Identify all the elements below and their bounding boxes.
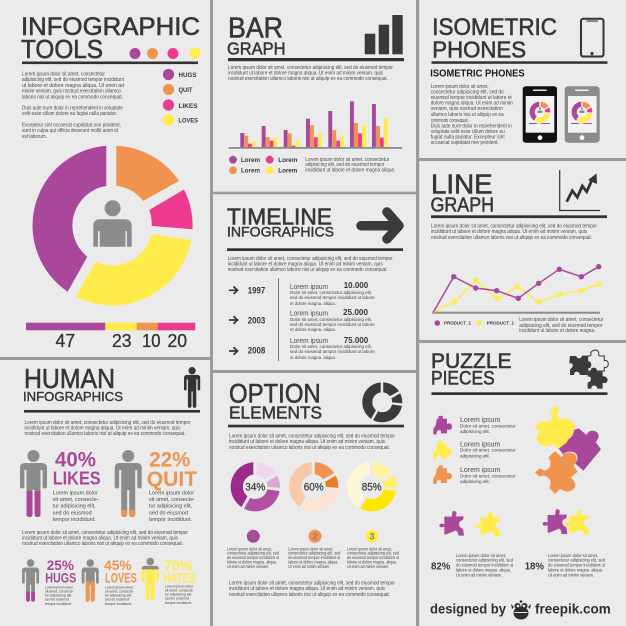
timeline years: 2008 [248,346,265,356]
puzzle legend: orange: Lorem ipsum [460,467,500,474]
chart legend: PRODUCT_1 [487,321,514,326]
donut chart [33,146,193,305]
intro text: ut labore et dolore magna aliqua. Ut enim ad [22,83,124,89]
option 1: consectetur adipisicing elit, sed [227,550,280,556]
subheading: ISOMETRIC PHONES [430,69,525,80]
line chart [432,264,601,314]
stat: 40% likes: sit amet, consecte- [53,497,99,503]
person: 45% loves [82,559,99,602]
puzzle legend: purple: Dolor sit amet, consectetur [460,424,516,428]
bar values: 47 [56,331,75,351]
option 1 [227,530,280,569]
stat: 18%: do eiusmod tempor incididunt ut [548,562,606,567]
legend: HUGS [178,72,197,79]
phone: black [523,86,557,143]
puzzle legend: purple: Lorem ipsum [460,417,500,424]
legend: LOVES [178,118,199,124]
intro text: Excepteur sint occaecat cupidatat non proident, [22,122,121,128]
stat: 45% loves: sed do eiusmod [105,598,129,602]
timeline entry 1: et dolore magna. aliqua. [290,301,336,306]
chart caption: incididunt ut labore et dolore magna. [519,328,595,334]
stat: 82%: Ut enim ad minim veniam. [456,572,502,577]
option 2: do eiusmod tempor incididunt ut [288,555,341,560]
option 2: Ut enim ad minim veniam. [288,564,330,569]
option 1: labore et dolore magna. aliqua. [227,559,277,564]
title: line graph [430,168,494,217]
panel: isometric phones [419,0,626,158]
intro text: Lorem ipsum dolor sit amet, consectetur adipisicing elit, sed do eiusmod tempor [24,420,191,426]
stat: 70% hates: sed do eiusmod [165,596,189,600]
intro text: nostrud exercitation ullamco laboris nisi ut aliquip ex ea commodo consequat. [229,445,390,451]
intro text: adipisicing elit, sed do eiusmod tempor incididunt [22,77,125,83]
chart legend: Lorem [241,168,260,175]
intro text: Lorem ipsum dolor sit amet, consectetur [22,72,105,78]
chart legend: Lorem [278,157,298,164]
timeline entry 3: 75.000 [344,335,369,345]
stat: 40% likes: sed do eiusmod [53,510,92,516]
phones text: fugiat nulla pariatur. Excepteur sint [431,134,505,140]
chart caption: adipisicing elit, sed do eiusmod tempor [305,162,385,168]
stat: 22% quit: 22% [149,449,191,472]
title: line graph: LINE [431,168,493,199]
person: 22% quit [115,450,142,517]
intro text [229,434,395,451]
donut: 34% [231,462,280,511]
stat: 70% hates: HATES [163,570,196,586]
intro text [431,224,597,241]
chart caption: Lorem ipsum dolor sit amet, consectetur [519,317,604,323]
title: infographic tools [21,13,200,64]
big puzzle [534,406,601,494]
timeline entry 2 [290,307,375,332]
option 2: Lorem ipsum dolor sit amet, [288,546,333,551]
bar values: 23 [112,331,132,351]
footer: freepik credit: freepik.com [535,601,611,616]
stat: 25% hugs: sed do eiusmod [45,598,69,602]
option 2: labore et dolore magna. aliqua. [288,559,338,564]
timeline entry 3 [290,335,375,360]
middle text: incididunt ut labore et dolore magna aliqua. Ut enim ad minim veniam, quis [22,535,178,541]
intro text: incididunt ut labore et dolore magna aliqua. Ut enim ad minim veniam, quis [431,229,587,235]
title: puzzle pieces: PUZZLE [431,349,512,373]
panel: timeline infographics [213,194,416,370]
title: timeline infographics: TIMELINE [227,203,332,229]
stat: 40% likes [53,449,101,523]
title: line graph: GRAPH [430,195,494,217]
option 3: Lorem ipsum dolor sit amet, [347,546,392,551]
option 3: labore et dolore magna. aliqua. [347,559,397,564]
stat: 25% hugs: tur adipisicing elit, [45,594,72,598]
intro text: minim veniam, quis nostrud exercitation ullamco [22,89,121,95]
option 2 [288,530,341,569]
icon: bars [365,15,403,54]
footer: freepik credit [430,600,611,620]
stat: 25% hugs: sit amet, consecte- [45,590,75,594]
puzzle legend: purple: adipisicing elit. [460,429,490,434]
timeline entry 3: Dolor sit amet, consectetur adipisicing elit, [290,344,372,349]
bar values [56,331,187,351]
puzzle legend: orange: Dolor sit amet, consectetur [460,474,516,478]
title: bar graph [227,13,286,58]
phones text: voluptate velit esse cillum dolore eu [431,129,505,135]
chart legend: PRODUCT_1 [444,321,471,326]
stat: 22% quit: tur adipisicing elit, [149,504,192,510]
chart caption: adipisicing elit, sed do eiusmod tempor [519,323,603,329]
intro text: Lorem ipsum dolor sit amet, consectetur adipisicing elit, sed do eiusmod tempor [228,65,393,71]
intro text: nostrud exercitation ullamco laboris nisi ut aliquip ex ea commodo consequat. [228,267,388,273]
icon: trend chart [560,170,600,210]
timeline entry 3: sed do eiusmod tempor incididunt ut labore [290,349,375,354]
intro text: sunt in culpa qui officia deserunt mollit anim id [22,128,118,134]
timeline entry 1: Lorem ipsum [290,282,328,291]
timeline entry 2: Lorem ipsum [290,308,328,318]
chart caption [305,157,395,174]
phones text: eiusmod tempor incididunt ut labore et [431,95,512,101]
intro text: nostrud exercitation ullamco laboris nisi ut aliquip ex ea commodo consequat. [431,235,592,241]
option 2: 2 [312,532,318,542]
intro text: incididunt ut labore et dolore magna aliqua. Ut enim ad minim veniam, quis [229,439,385,445]
option 3: Ut enim ad minim veniam. [347,564,389,569]
stat: 70% hates: tempor incididunt. [165,601,192,605]
stat: 70% hates: tur adipisicing elit, [165,592,192,596]
title: option elements [229,378,322,422]
puzzle legend: yellow: adipisicing elit. [460,454,490,458]
closing text: Lorem ipsum dolor sit amet, consectetur adipisicing elit, sed do eiusmod tempor [229,580,395,586]
legend: QUIT [178,87,192,94]
stat: 82%: Lorem ipsum dolor sit amet, [456,553,506,558]
icon: person [93,200,132,247]
stat: 82%: labore et dolore magna. aliqua. [456,567,511,572]
icon: puzzle [569,350,608,389]
phone: grey [565,86,600,143]
chart legend: Lorem [278,168,298,175]
phones text: consectetur adipisicing elit, sed do [431,90,504,96]
intro text [228,65,393,82]
chart legend [434,320,514,326]
phones text: occaecat cupidatat non proident. [431,140,499,146]
footer: freepik credit: designed by [430,601,506,616]
timeline entry 1: 10.000 [344,280,369,290]
stat: 45% loves: LOVES [105,570,137,586]
middle text: nostrud exercitation ullamco laboris nisi ut aliquip ex ea commodo consequat. [22,541,183,547]
stat: 25% hugs [45,557,76,606]
stat: 45% loves: tempor incididunt. [105,602,132,606]
chart caption [519,317,604,334]
pieces: pair joined [543,509,589,535]
stat: 25% hugs: Lorem ipsum dolor [45,586,74,590]
title: isometric phones [432,14,557,62]
intro text [22,72,125,140]
chart legend [229,156,298,175]
option 1: do eiusmod tempor incididunt ut [227,555,280,560]
intro text: est laborum. [22,134,47,140]
donut: 60%: 60% [304,482,324,494]
title: infographic tools: TOOLS [21,34,103,64]
stat: 45% loves: Lorem ipsum dolor [105,586,134,590]
stat: 70% hates: 70% [164,557,193,573]
legend [163,69,199,126]
icon: phone outline [581,19,604,56]
timeline entry 2: 25.000 [343,307,368,317]
option 2: consectetur adipisicing elit, sed [288,550,341,556]
stat: 18%: Ut enim ad minim veniam. [548,572,594,577]
phones text: veniam, quis nostrud exercitation [431,106,503,112]
chart caption: Lorem ipsum dolor sit amet, consectetur [305,157,390,163]
intro text: incididunt ut labore et dolore magna aliqua. Ut enim ad minim veniam, quis [24,426,181,432]
icon: freepik logo [511,600,531,620]
timeline years [229,286,265,356]
timeline entry 2: sed do eiusmod tempor incididunt ut labore [290,322,375,327]
title: isometric phones: PHONES [432,36,526,62]
stat: 25% hugs: tempor incididunt. [45,602,72,606]
title: bar graph: BAR [228,13,283,45]
intro text [24,420,191,437]
intro text: incididunt ut labore et dolore magna aliqua. Ut enim ad minim veniam, quis [228,262,383,268]
title: human infographics: HUMAN [24,363,115,394]
timeline entry 1: Dolor sit amet, consectetur adipisicing elit, [290,290,372,295]
stacked bar [26,323,195,330]
stat: 45% loves: sit amet, consecte- [105,590,135,594]
timeline entry 2: et dolore magna. aliqua. [290,327,336,332]
option 3: consectetur adipisicing elit, sed [347,550,400,556]
puzzle legend: yellow [433,441,516,459]
timeline entry 1 [290,280,375,306]
option 3: 3 [369,532,375,542]
title: isometric phones: ISOMETRIC [432,14,557,41]
title: puzzle pieces: PIECES [431,368,495,389]
option 3 [347,530,400,569]
person: 25% hugs [22,559,39,602]
stat: 18% [525,553,606,577]
panel: line graph [419,161,626,340]
icon: donut [362,382,402,422]
intro text: Lorem ipsum dolor sit amet, consectetur adipisicing elit, sed do eiusmod tempor [228,256,393,262]
panel: puzzle pieces [419,343,626,626]
puzzle legend: purple [433,416,516,434]
phones text: ullamco laboris nisi ut aliquip ex ea [431,112,504,118]
intro text: velit esse cillum dolore eu fugiat nulla pariatur. [22,111,117,117]
phones text: commodo consequat. [431,118,469,124]
closing text: incididunt ut labore et dolore magna aliqua. Ut enim ad minim veniam, quis [229,586,385,592]
intro text: nostrud exercitation ullamco laboris nisi ut aliquip ex ea commodo consequat. [228,76,388,82]
stat: 40% likes: tur adipisicing elit, [53,504,96,510]
stat: 40% likes: tempor incididunt. [53,517,96,523]
option 1: Lorem ipsum dolor sit amet, [227,546,272,551]
icon: big arrow [361,212,399,239]
intro text: nostrud exercitation ullamco laboris nisi ut aliquip ex ea commodo consequat. [24,431,186,437]
stat: 40% likes: LIKES [53,468,101,488]
stat: 22% quit: sit amet, consecte- [149,497,195,503]
stat: 18%: labore et dolore magna. aliqua. [548,567,603,572]
middle text: Lorem ipsum dolor sit amet, consectetur adipisicing elit, sed do eiusmod tempor [22,530,188,536]
person: 40% likes [20,450,47,517]
timeline years: 1997 [248,286,265,296]
option 1: Ut enim ad minim veniam. [227,564,269,569]
stat: 45% loves: 45% [104,557,132,573]
pieces: pair apart [439,511,500,536]
icon: standing person [184,367,200,408]
timeline entry 3: et dolore magna. aliqua. [290,355,336,360]
panel: infographic tools [0,0,210,357]
stat: 70% hates [163,557,196,605]
stat: 22% quit: sed do eiusmod [149,510,188,516]
stat: 40% likes: 40% [55,449,96,472]
stat: 18%: Lorem ipsum dolor sit amet, [548,553,598,558]
panel: bar graph [213,0,416,192]
stat: 18%: consectetur adipisicing elit, sed [548,558,606,563]
stat: 82% [431,553,514,577]
title: option elements: OPTION [229,378,321,408]
puzzle legend: orange [433,465,516,484]
panel: option elements [213,373,416,626]
timeline entry 1: sed do eiusmod tempor incididunt ut labore [290,295,375,300]
stat: 82%: consectetur adipisicing elit, sed [456,558,514,563]
title: bar graph: GRAPH [227,38,286,58]
legend: LIKES [178,103,198,110]
puzzle legend: orange: adipisicing elit. [460,479,490,484]
person: 70% hates [142,558,159,600]
stat: 70% hates: sit amet, consecte- [165,589,195,593]
panel: human infographics [20,367,200,606]
intro text: Lorem ipsum dolor sit amet, consectetur adipisicing elit, sed do eiusmod tempor [229,434,395,440]
stat: 45% loves: tur adipisicing elit, [105,594,132,598]
stat: 22% quit: Lorem ipsum dolor [149,490,194,496]
option 1: 1 [251,532,256,542]
donut: 85% [347,462,396,511]
title: puzzle pieces [431,349,512,389]
puzzle legend: yellow: Dolor sit amet, consectetur [460,448,516,452]
stat: 40% likes: Lorem ipsum dolor [53,490,98,496]
stat: 82%: 82% [431,561,450,572]
donut: 34%: 34% [245,482,265,494]
title: option elements: ELEMENTS [229,402,322,422]
stat: 18%: 18% [525,561,544,572]
timeline entry 2: Dolor sit amet, consectetur adipisicing elit, [290,317,372,322]
phones text: dolore magna aliqua. Ut enim ad minim [431,101,513,107]
stat: 22% quit: tempor incididunt. [149,517,192,523]
puzzle legend: yellow: Lorem ipsum [460,441,500,448]
phones text: Duis aute irure dolor in reprehenderit in [431,124,512,130]
intro text: incididunt ut labore et dolore magna aliqua. Ut enim ad minim veniam, quis [228,70,383,76]
timeline entry 3: Lorem ipsum [290,336,328,345]
intro text: Duis aute irure dolor in reprehenderit in voluptate [22,106,123,112]
bar values: 10 [142,331,160,351]
intro text: laboris nisi ut aliquip ex ea commodo consequat. [22,94,123,100]
bar chart [229,101,402,149]
phones text [431,84,513,146]
middle text [22,530,188,547]
bar values: 20 [168,331,187,351]
timeline years: 2003 [248,315,265,325]
stat: 82%: do eiusmod tempor incididunt ut [456,562,514,567]
phones text: Lorem ipsum dolor sit amet, [431,84,489,90]
intro text: Lorem ipsum dolor sit amet, consectetur adipisicing elit, sed do eiusmod tempor [431,224,597,230]
stat: 22% quit [147,449,197,523]
title: human infographics: INFOGRAPHICS [23,389,123,404]
donut: 85%: 85% [362,482,382,494]
title: infographic tools: INFOGRAPHIC [21,13,200,41]
chart legend: Lorem [241,157,260,164]
stat: 45% loves [104,557,137,606]
donut: 60% [289,462,338,511]
closing text: nostrud exercitation ullamco laboris nisi ut aliquip ex ea commodo consequat. [229,592,390,598]
closing text [229,580,395,598]
title dots [130,48,200,59]
stat: 70% hates: Lorem ipsum dolor [165,585,194,589]
stat: 25% hugs: HUGS [45,570,76,586]
title: timeline infographics: INFOGRAPHICS [227,224,334,240]
stat: 25% hugs: 25% [47,557,75,573]
chart caption: incididunt ut labore et dolore magna aliqua. [305,168,395,174]
option 3: do eiusmod tempor incididunt ut [347,555,400,560]
intro text [228,256,393,273]
stat: 22% quit: QUIT [147,467,197,491]
